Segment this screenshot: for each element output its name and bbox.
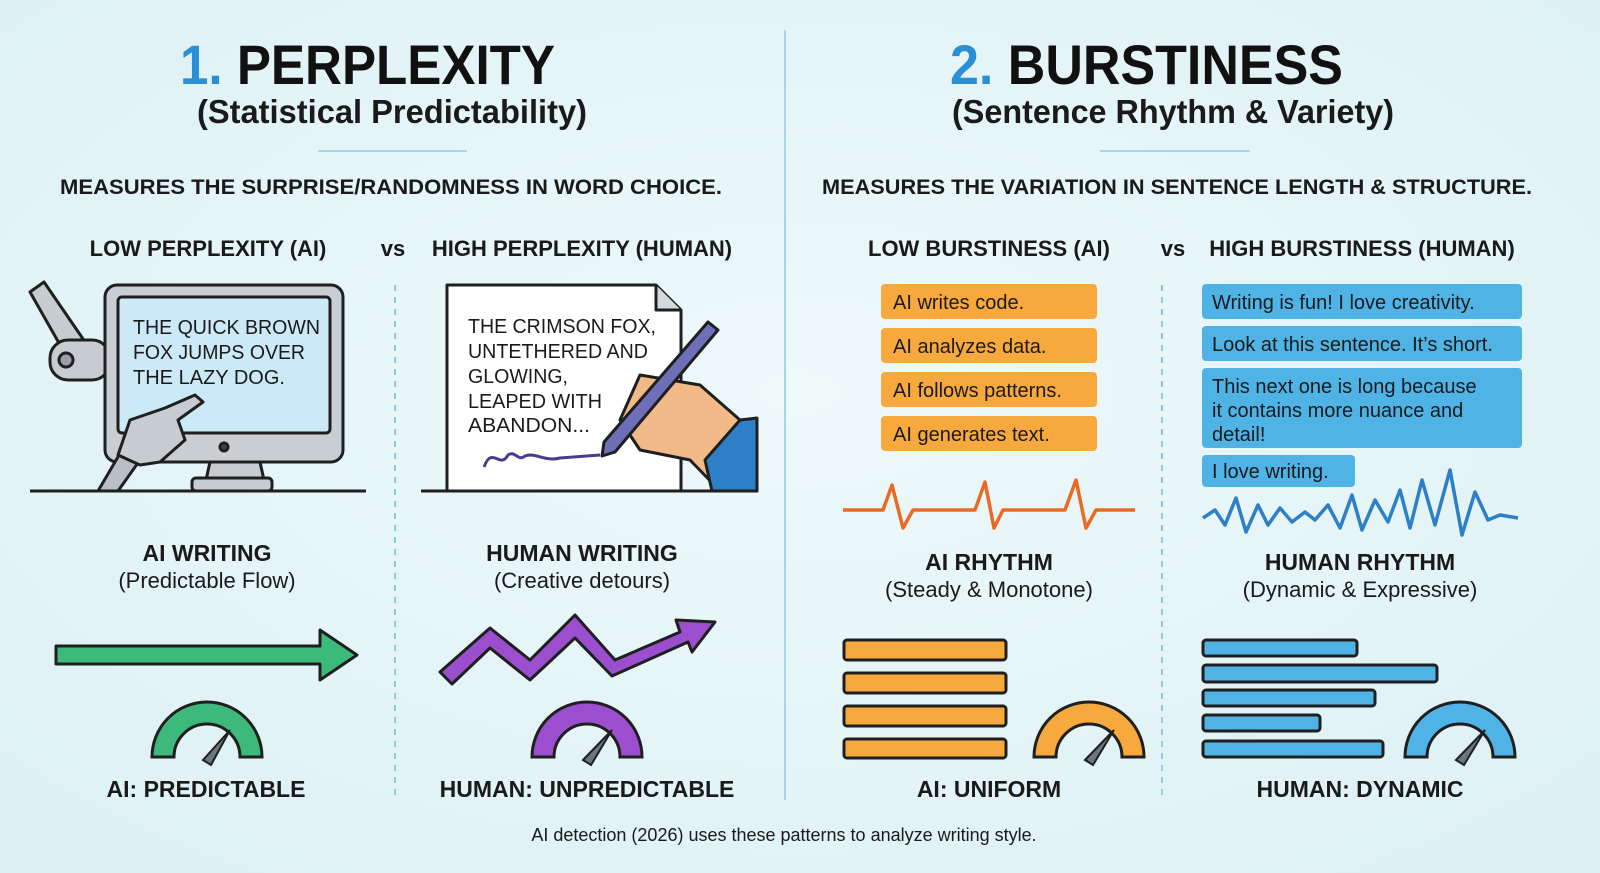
label: human writing: HUMAN WRITING <box>486 540 678 566</box>
AI sentence bubbles <box>881 284 1097 451</box>
title: perplexity <box>180 33 587 130</box>
waveform: AI rhythm <box>843 480 1135 528</box>
comparison headings: burstiness <box>868 236 1515 261</box>
label: AI uniform: AI: UNIFORM <box>917 776 1061 802</box>
label: human rhythm: HUMAN RHYTHM <box>1265 549 1455 575</box>
label: human unpredictable: HUMAN: UNPREDICTABLE <box>440 776 734 802</box>
comparison headings: perplexity: LOW PERPLEXITY (AI) <box>90 236 326 261</box>
title: perplexity: 1. PERPLEXITY <box>180 33 555 96</box>
comparison headings: burstiness: vs <box>1161 236 1185 261</box>
label: human dynamic: HUMAN: DYNAMIC <box>1257 776 1463 802</box>
human sentence bubbles: Writing is fun! I love creativity. <box>1212 292 1475 314</box>
comparison headings: perplexity: vs <box>381 236 405 261</box>
arrow: zigzag purple <box>440 615 715 684</box>
human sentence bubbles <box>1202 284 1522 487</box>
AI sentence bubbles: AI generates text. <box>893 424 1050 446</box>
waveform: human rhythm <box>1203 470 1518 535</box>
illustration: AI monitor with robot hand: THE QUICK BROWN <box>133 317 320 339</box>
label: AI rhythm <box>885 549 1093 602</box>
illustration: AI monitor with robot hand: THE LAZY DOG. <box>133 367 285 389</box>
human sentence bubbles: detail! <box>1212 424 1265 446</box>
label: AI writing: AI WRITING <box>142 540 272 566</box>
title: burstiness: (Sentence Rhythm & Variety) <box>952 93 1394 130</box>
gauge: AI predictable <box>152 702 262 765</box>
comparison headings: perplexity: HIGH PERPLEXITY (HUMAN) <box>432 236 732 261</box>
label: human writing: (Creative detours) <box>494 568 670 593</box>
comparison headings: perplexity <box>90 236 732 261</box>
illustration: human writing on paper: ABANDON... <box>468 415 590 437</box>
label: human writing <box>486 540 678 593</box>
human sentence bubbles: Look at this sentence. It’s short. <box>1212 334 1493 356</box>
bars: AI uniform <box>844 640 1006 758</box>
gauge: AI uniform <box>1034 702 1144 765</box>
description: burstiness: MEASURES THE VARIATION IN SENTENCE LENGTH & STRUCTURE. <box>822 175 1532 199</box>
illustration: human writing on paper: GLOWING, <box>468 366 568 388</box>
footer note: AI detection (2026) uses these patterns to analyze writing style. <box>531 825 1037 845</box>
AI sentence bubbles: AI analyzes data. <box>893 336 1046 358</box>
label: AI writing: (Predictable Flow) <box>118 568 296 593</box>
label: AI writing <box>118 540 296 593</box>
bars: human dynamic <box>1203 640 1437 757</box>
illustration: AI monitor with robot hand: FOX JUMPS OVER <box>133 342 305 364</box>
title: burstiness <box>950 33 1394 130</box>
illustration: human writing on paper: LEAPED WITH <box>468 391 602 413</box>
label: human rhythm <box>1243 549 1477 602</box>
description: perplexity: MEASURES THE SURPRISE/RANDOMNESS IN WORD CHOICE. <box>60 175 722 199</box>
gauge: human unpredictable <box>532 702 642 765</box>
AI sentence bubbles: AI writes code. <box>893 292 1024 314</box>
label: AI predictable: AI: PREDICTABLE <box>107 776 305 802</box>
label: AI rhythm: (Steady & Monotone) <box>885 577 1093 602</box>
title: perplexity: (Statistical Predictability) <box>197 93 587 130</box>
gauge: human dynamic <box>1405 702 1515 765</box>
illustration: AI monitor with robot hand <box>30 282 366 491</box>
comparison headings: burstiness: HIGH BURSTINESS (HUMAN) <box>1209 236 1515 261</box>
arrow: straight green <box>56 630 357 680</box>
comparison headings: burstiness: LOW BURSTINESS (AI) <box>868 236 1110 261</box>
illustration: human writing on paper <box>421 285 757 491</box>
human sentence bubbles: I love writing. <box>1212 461 1329 483</box>
human sentence bubbles: This next one is long because <box>1212 376 1477 398</box>
AI sentence bubbles: AI follows patterns. <box>893 380 1062 402</box>
illustration: human writing on paper: UNTETHERED AND <box>468 341 648 363</box>
title: burstiness: 2. BURSTINESS <box>950 33 1343 96</box>
illustration: human writing on paper: THE CRIMSON FOX, <box>468 316 656 338</box>
human sentence bubbles: it contains more nuance and <box>1212 400 1463 422</box>
label: human rhythm: (Dynamic & Expressive) <box>1243 577 1477 602</box>
label: AI rhythm: AI RHYTHM <box>925 549 1053 575</box>
